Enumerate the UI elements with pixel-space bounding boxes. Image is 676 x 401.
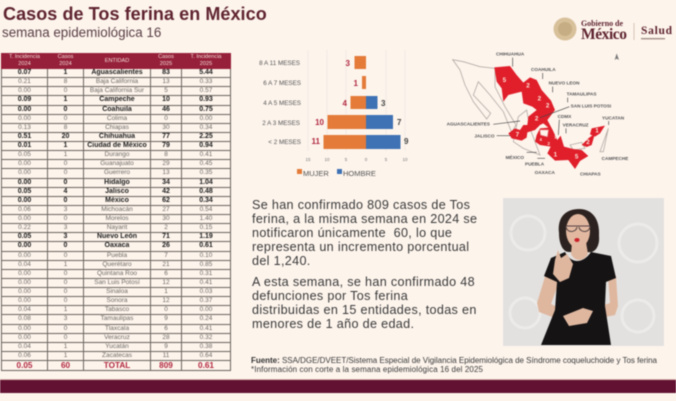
male values: 3 [381,99,386,108]
state labels: TAMAULIPAS [567,92,597,97]
table: cases and incidence by state: 0.07 [18,69,31,76]
table: cases and incidence by state: Durango [105,151,129,158]
table: cases and incidence by state: 0.93 [199,96,213,103]
table: cases and incidence by state: 79 [162,142,170,149]
table: cases and incidence by state: 0.00 [18,334,31,341]
text block: confirmed cases: del 1,240. [252,254,311,268]
table: cases and incidence by state: 0.00 [18,297,31,304]
table: cases and incidence by state: 0.00 [18,106,31,113]
bottom maroon band [0,379,676,393]
text block: confirmed cases [252,198,478,268]
table: cases and incidence by state: 0.57 [200,87,212,94]
state labels: JALISCO [474,133,495,138]
table: cases and incidence by state [0,52,232,372]
table: cases and incidence by state: 809 [159,360,173,370]
logo: Gobierno de México, Salud: México [581,26,627,43]
table: cases and incidence by state: 9 [164,315,168,322]
male bars [366,96,400,149]
table: cases and incidence by state: 0.00 [18,179,31,186]
source footnote: Fuente: SSA/DGE/DVEET/Sistema Especial de Vigilancia Epidemiológica de Síndrome coqueluchoide y Tos ferina [251,356,658,365]
table: cases and incidence by state: 0.64 [200,352,212,359]
outline of non-affected states [453,60,516,132]
table: cases and incidence by state: 5.44 [199,69,213,76]
table: cases and incidence by state: 0 [64,242,67,249]
table: cases and incidence by state: Puebla [107,252,127,259]
state labels: YUCATAN [602,115,625,120]
table: cases and incidence by state: 1 [64,343,67,350]
table: cases and incidence by state: 0.41 [200,279,212,286]
table: cases and incidence by state: Oaxaca [105,242,129,249]
state labels: CDMX [558,114,572,119]
table: cases and incidence by state: 0.00 [18,215,31,222]
table: cases and incidence by state: Hidalgo [104,179,130,186]
table: cases and incidence by state: 0.85 [200,261,212,268]
state labels [447,52,628,177]
table: cases and incidence by state: 46 [162,106,170,113]
bar chart: cases by age and sex [258,55,409,178]
age labels: 8 A 11 MESES [259,60,300,67]
age labels: < 2 MESES [268,139,301,146]
table: cases and incidence by state: 0.04 [18,261,31,268]
table: cases and incidence by state: 0.05 [18,233,31,240]
affected states [494,66,588,169]
table: cases and incidence by state: 2.25 [199,133,213,140]
table: cases and incidence by state: 0.54 [200,206,212,213]
table: cases and incidence by state: T. Incidencia [9,54,40,60]
table: cases and incidence by state: Quintana Roo [97,270,137,277]
table: cases and incidence by state: 0.06 [18,206,31,213]
state counts: 2 [547,141,550,146]
table: cases and incidence by state: 0 [64,334,67,341]
table: cases and incidence by state: Tamaulipas [101,315,133,322]
table: cases and incidence by state: 0.00 [18,270,31,277]
table: cases and incidence by state: 62 [162,197,170,204]
male values: 9 [404,137,409,146]
table: cases and incidence by state: 0.00 [200,115,212,122]
age labels: 4 A 5 MESES [263,100,301,107]
table: cases and incidence by state: Ciudad de México [87,142,147,149]
table: cases and incidence by state: 0.22 [18,224,31,231]
table: cases and incidence by state: 0.00 [18,288,31,295]
state counts: 2 [546,102,550,109]
table: cases and incidence by state: 12 [162,279,170,286]
table: cases and incidence by state: 6 [164,325,168,332]
state counts: 2 [526,83,530,90]
table: cases and incidence by state: 0 [64,197,67,204]
table: cases and incidence by state: Chihuahua [99,133,135,140]
table: cases and incidence by state: 0.37 [200,297,212,304]
table: cases and incidence by state: Guanajuato [100,160,134,167]
table: cases and incidence by state: México [105,197,129,204]
table: cases and incidence by state: 3 [64,206,67,213]
text block: deaths [252,275,477,331]
table: cases and incidence by state: 0.03 [200,288,212,295]
table: cases and incidence by state: 2025 [160,61,172,67]
state labels: COAHUILA [531,67,556,72]
table: cases and incidence by state: 27 [162,206,170,213]
table: cases and incidence by state: 0 [64,179,67,186]
female values [312,59,359,146]
sign language interpreter photo [502,198,664,346]
table: cases and incidence by state: 0.04 [18,306,31,313]
table: cases and incidence by state: 0.00 [18,279,31,286]
table: cases and incidence by state: 0 [64,325,67,332]
table: cases and incidence by state: 83 [162,69,170,76]
table: cases and incidence by state: 77 [162,133,170,140]
state counts: 1 [554,134,557,139]
table: cases and incidence by state: 0.21 [18,78,31,85]
table: cases and incidence by state: 0 [64,160,67,167]
table: cases and incidence by state: 1 [64,352,67,359]
table: cases and incidence by state: Yucatán [105,343,129,350]
text block: deaths: A esta semana, se han confirmado 48 [252,275,475,289]
table: cases and incidence by state: Baja California Sur [90,87,144,94]
axis numbers [305,157,408,162]
table: cases and incidence by state: 0.05 [18,188,31,195]
table: cases and incidence by state: Casos [158,54,174,60]
table: cases and incidence by state: 1 [164,288,168,295]
text block: deaths: defunciones por Tos ferina [252,289,408,303]
state labels: AGUASCALIENTES [447,122,490,127]
table: cases and incidence by state: 0.15 [200,224,212,231]
table: cases and incidence by state: 2024 [18,61,31,67]
state counts [503,77,599,160]
table: cases and incidence by state: 0.10 [200,252,212,259]
table: cases and incidence by state: 2 [164,224,168,231]
face and neck [571,242,588,260]
male values: 7 [397,118,402,127]
table: cases and incidence by state: Guerrero [104,169,130,176]
table: cases and incidence by state: 0 [64,297,67,304]
map of Mexico with confirmed cases by state [446,52,629,177]
black dress [541,252,616,345]
table: cases and incidence by state: 8 [64,78,67,85]
table: cases and incidence by state: 34 [162,179,170,186]
axis numbers: 5 [345,157,348,162]
table: cases and incidence by state: 1 [64,261,67,268]
text block: confirmed cases: Se han confirmado 809 casos de Tos [252,198,470,212]
table: cases and incidence by state: 0.00 [18,242,31,249]
table: cases and incidence by state: 0 [64,215,67,222]
state labels: CHIAPAS [580,172,601,177]
age labels: 6 A 7 MESES [263,80,301,87]
table: cases and incidence by state: 0.41 [200,325,212,332]
axis numbers: 10 [402,157,408,162]
table: cases and incidence by state: 0.32 [200,334,212,341]
table: cases and incidence by state: 1 [64,306,67,313]
state counts: 4 [539,137,542,142]
table: cases and incidence by state: 0 [164,115,168,122]
text block: deaths: distribuidas en 15 entidades, todas en [252,303,477,317]
table: cases and incidence by state: 21 [162,261,170,268]
table: cases and incidence by state: 0.45 [200,160,212,167]
state labels: SAN LUIS POTOSI [571,104,611,109]
north arrow [615,53,619,60]
table: cases and incidence by state: Baja California [96,78,138,85]
text block: confirmed cases: ferina, a la misma semana en 2024 se [252,212,477,226]
table: cases and incidence by state: Veracruz [104,334,130,341]
female values: 10 [315,118,325,127]
table: cases and incidence by state: 1 [64,151,67,158]
table: cases and incidence by state: 3 [64,224,67,231]
table: cases and incidence by state: 0.00 [18,115,31,122]
table: cases and incidence by state: 6 [164,270,168,277]
table: cases and incidence by state: 2024 [59,61,72,67]
table: cases and incidence by state: ENTIDAD [105,58,129,64]
table: cases and incidence by state: 0 [64,106,67,113]
state counts: 2 [586,139,590,146]
table: cases and incidence by state: 0.61 [198,360,214,370]
table: cases and incidence by state: 0 [64,87,67,94]
age labels: 2 A 3 MESES [262,120,300,127]
table: cases and incidence by state: Michoacán [101,206,133,213]
table: cases and incidence by state: 0.00 [18,160,31,167]
table: cases and incidence by state: Tabasco [105,306,129,313]
leader lines [493,58,609,158]
state labels: OAXACA [535,170,555,175]
table: cases and incidence by state: 9 [164,343,168,350]
table: cases and incidence by state: 8 [164,151,168,158]
table: cases and incidence by state: Jalisco [105,188,129,195]
table: cases and incidence by state: 0.24 [200,315,212,322]
axis numbers: 10 [324,157,330,162]
axis numbers: 15 [305,157,311,162]
table: cases and incidence by state: 60 [61,360,70,370]
table: cases and incidence by state: Morelos [105,215,129,222]
table: cases and incidence by state: 13 [162,78,170,85]
table: cases and incidence by state: 0.09 [18,96,31,103]
table: cases and incidence by state: 0.00 [200,306,212,313]
subtitle: semana epidemiológica 16 [2,25,161,40]
table: cases and incidence by state: 1.40 [200,215,212,222]
table: cases and incidence by state: 0.00 [18,197,31,204]
table: cases and incidence by state: 0.38 [200,343,212,350]
state labels: CHIHUAHUA [496,52,525,57]
table: cases and incidence by state: 0.06 [18,352,31,359]
table: cases and incidence by state: 0 [64,169,67,176]
table: cases and incidence by state: 2025 [200,61,212,67]
table: cases and incidence by state: Aguascalientes [91,69,143,76]
state labels: NUEVO LEON [549,81,580,86]
table: cases and incidence by state: 42 [162,188,170,195]
table: cases and incidence by state: 0.48 [199,188,213,195]
table: cases and incidence by state: 8 [64,124,67,131]
text block: confirmed cases: notificaron únicamente 60, lo que [252,226,452,240]
table: cases and incidence by state: 3 [64,315,67,322]
text block: deaths: menores de 1 año de edad. [252,317,414,331]
table: cases and incidence by state: 12 [162,297,170,304]
state counts: 5 [503,77,507,84]
table: cases and incidence by state: 30 [162,124,170,131]
state labels: VERACRUZ [563,122,589,127]
table: cases and incidence by state: 0.35 [200,169,212,176]
table: cases and incidence by state: 0 [64,252,67,259]
state labels: MÉXICO [506,153,524,160]
table: cases and incidence by state: 0.05 [18,151,31,158]
table: cases and incidence by state: 3 [64,233,67,240]
table: cases and incidence by state: 1 [64,96,67,103]
table: cases and incidence by state: Tlaxcala [105,325,129,332]
state counts: 1 [595,127,599,134]
table: cases and incidence by state: 28 [162,334,170,341]
table: cases and incidence by state: 4 [64,188,67,195]
table: cases and incidence by state: Nayarit [107,224,127,231]
table: cases and incidence by state: 30 [162,215,170,222]
logo: Gobierno de México, Salud: Salud [641,25,673,37]
table: cases and incidence by state: 0.00 [18,169,31,176]
state counts: 7 [516,131,520,138]
axis numbers: 0 [365,157,368,162]
age labels [259,60,301,146]
legend [297,169,376,178]
table: cases and incidence by state: 1.04 [199,179,213,186]
table: cases and incidence by state: T. Incidencia [190,54,222,60]
table: cases and incidence by state: 0 [64,270,67,277]
table: cases and incidence by state: 0.75 [199,106,213,113]
table: cases and incidence by state: 7 [164,252,168,259]
table: cases and incidence by state: TOTAL [104,360,130,370]
table: cases and incidence by state: Zacatecas [102,352,132,359]
title: Casos de Tos ferina en México [3,4,267,24]
table: cases and incidence by state: Colima [107,115,127,122]
table: cases and incidence by state: Querétaro [102,261,132,268]
glasses and lips [566,226,590,232]
table: cases and incidence by state: 0.34 [200,124,212,131]
table: cases and incidence by state: Nuevo León [97,233,137,240]
source footnote: *Información con corte a la semana epidemiológica 16 del 2025 [251,365,484,374]
logo: Gobierno de México, Salud [553,17,673,43]
state labels: PUEBLA [525,162,545,167]
table: cases and incidence by state: Sonora [107,297,127,304]
table: cases and incidence by state: 10 [162,96,170,103]
table: cases and incidence by state: 0.31 [200,270,212,277]
table: cases and incidence by state: Campeche [99,96,135,103]
table: cases and incidence by state: 0 [164,306,168,313]
table: cases and incidence by state: 20 [62,133,69,140]
table: cases and incidence by state: 13 [162,169,170,176]
table: cases and incidence by state: 0.13 [18,124,31,131]
raised hand [553,250,573,282]
table: cases and incidence by state: 1 [64,142,67,149]
lower hand [563,308,593,326]
table: cases and incidence by state: 0 [64,115,67,122]
male values [381,99,409,146]
table: cases and incidence by state: 0.05 [17,360,32,370]
table: cases and incidence by state: 0.00 [18,87,31,94]
legend: MUJER [303,169,329,178]
state labels: CAMPECHE [602,156,628,161]
table: cases and incidence by state: Coahuila [102,106,132,113]
table: cases and incidence by state: 0.04 [18,343,31,350]
table: cases and incidence by state: Chiapas [105,124,129,131]
female values: 4 [343,99,348,108]
table: cases and incidence by state: 0.94 [199,142,213,149]
table: cases and incidence by state: 0.33 [200,78,212,85]
source footnote [250,356,658,374]
hair [559,209,599,252]
table: cases and incidence by state: 11 [163,352,169,359]
table: cases and incidence by state: 0.41 [200,151,212,158]
table: cases and incidence by state: 0.01 [18,142,31,149]
female bars [324,56,366,149]
table: cases and incidence by state: 1.19 [199,233,213,240]
state counts: 5 [575,153,579,160]
arms [537,270,575,324]
table: cases and incidence by state: 0.34 [199,197,213,204]
table: cases and incidence by state: 0.08 [18,315,31,322]
table: cases and incidence by state: 0 [64,279,67,286]
table: cases and incidence by state: 0 [64,288,67,295]
female values: 11 [312,137,321,146]
table: cases and incidence by state: 26 [162,242,170,249]
text block: confirmed cases: representa un incremento porcentual [252,240,469,254]
logo: Gobierno de México, Salud: Gobierno de [581,19,623,28]
state counts: 2 [535,115,539,122]
table: cases and incidence by state: 0.51 [18,133,31,140]
state counts: 2 [538,95,542,102]
table: cases and incidence by state: Casos [58,54,73,60]
table: cases and incidence by state: 5 [164,87,168,94]
table: cases and incidence by state: 1 [64,69,67,76]
table: cases and incidence by state: Sinaloa [106,288,128,295]
female values: 3 [346,59,351,68]
table: cases and incidence by state: 0.00 [18,252,31,259]
table: cases and incidence by state: 0.00 [18,325,31,332]
state counts: 1 [554,152,558,159]
table: cases and incidence by state: 29 [162,160,170,167]
axis numbers: 5 [385,157,388,162]
female values: 1 [354,79,359,88]
table: cases and incidence by state: 0.61 [199,242,213,249]
table: cases and incidence by state: San Luis Potosí [94,279,140,286]
legend: HOMBRE [343,169,376,178]
table: cases and incidence by state: 71 [162,233,170,240]
